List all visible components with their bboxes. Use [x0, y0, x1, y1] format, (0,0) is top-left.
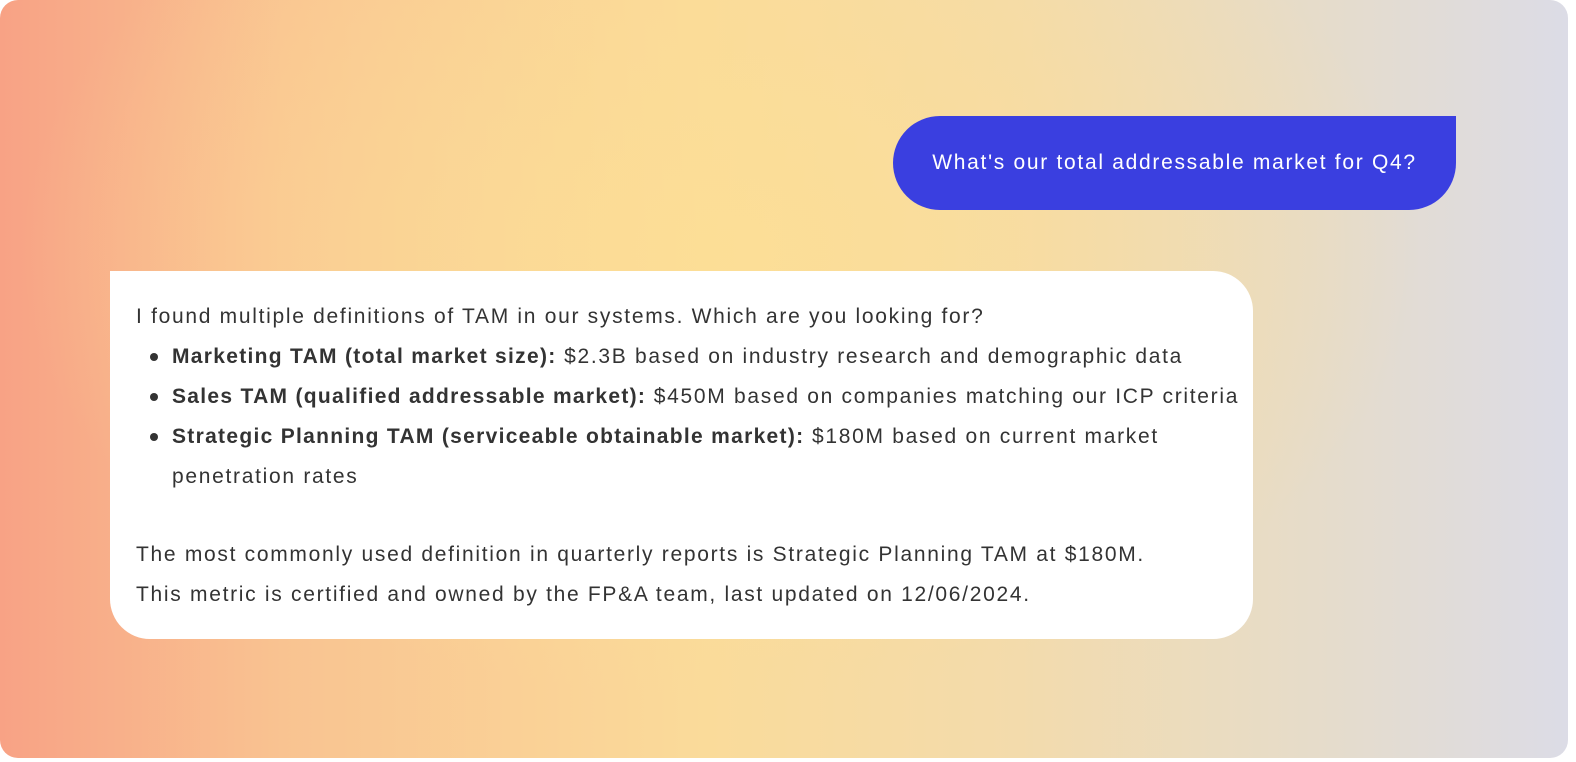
definitions list: Sales TAM (qualified addressable market): $450M based on companies matching our ICP criteria: [172, 385, 1239, 408]
summary text: The most commonly used definition in quarterly reports is Strategic Planning TAM at $180M.: [136, 543, 1145, 566]
user question bubble: What's our total addressable market for Q4?: [932, 151, 1417, 174]
summary text: [136, 543, 1145, 606]
assistant response bubble: [110, 271, 1253, 639]
definitions list: [150, 345, 1239, 488]
definitions list: Strategic Planning TAM (serviceable obtainable market): $180M based on current market: [172, 425, 1159, 448]
summary text: This metric is certified and owned by the FP&A team, last updated on 12/06/2024.: [136, 583, 1031, 606]
intro line: I found multiple definitions of TAM in our systems. Which are you looking for?: [136, 305, 984, 328]
user question bubble: [893, 116, 1456, 210]
definitions list: Marketing TAM (total market size): $2.3B based on industry research and demographic data: [172, 345, 1183, 368]
definitions list: penetration rates: [172, 465, 359, 488]
